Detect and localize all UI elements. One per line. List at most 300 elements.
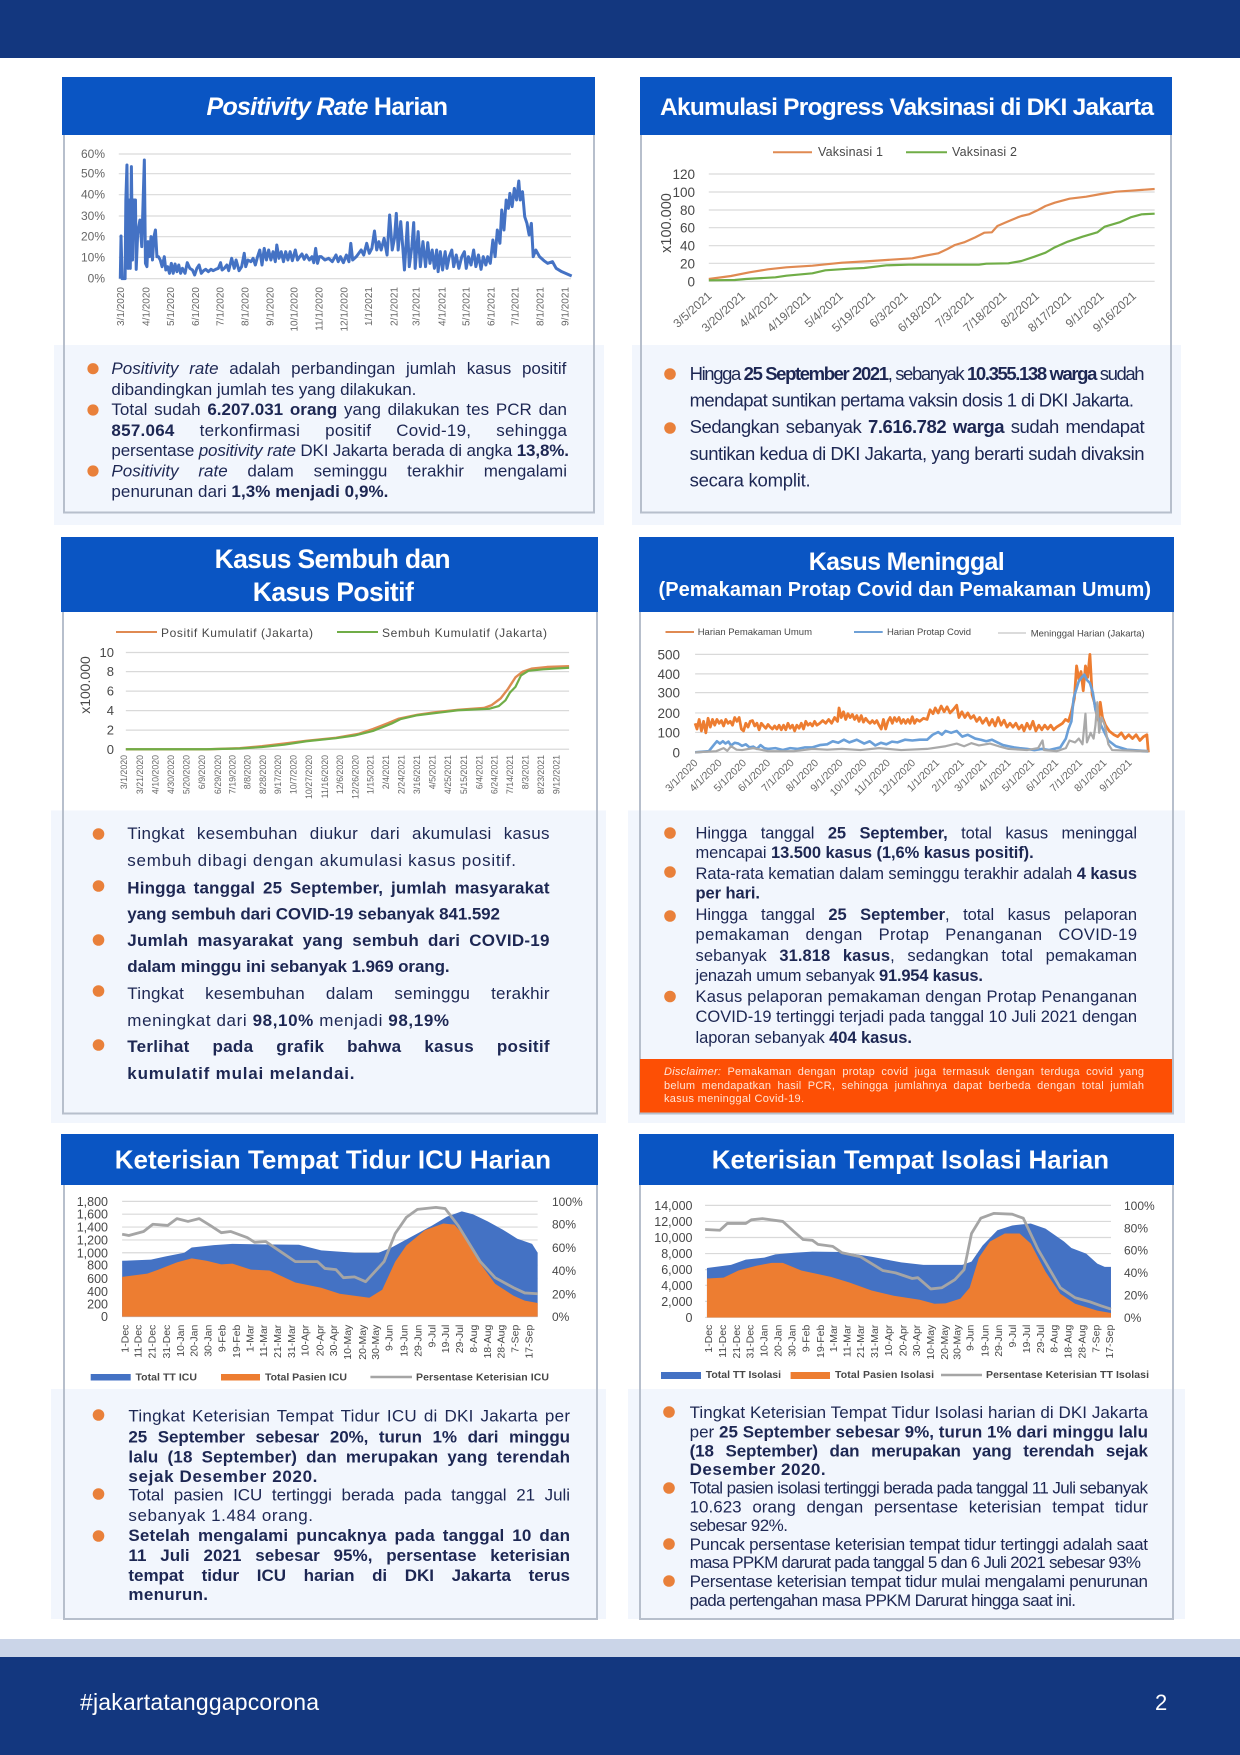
area chart: isolation occupancy: 10-Apr	[883, 1324, 895, 1356]
line chart: daily burials and deaths: 6/1/2020	[736, 757, 773, 795]
area chart: ICU occupancy: 31-Mar	[286, 1324, 298, 1358]
text block: positivity rate bullets: Positivity rate dalam seminggu terakhir mengalami	[111, 462, 567, 481]
line chart: cumulative cases: 7/14/2021	[505, 755, 515, 794]
line chart: cumulative cases: 2/4/2021	[381, 755, 391, 789]
line chart: cumulative cases: 4/25/2021	[443, 755, 453, 794]
line chart: vaccination progress: 5/4/2021	[802, 289, 846, 330]
area chart: ICU occupancy: 11-Dec	[132, 1325, 144, 1358]
area chart: isolation occupancy: 20-May	[939, 1324, 951, 1360]
line chart: vaccination progress: 60	[680, 221, 695, 236]
line chart: vaccination progress: 4/19/2021	[764, 289, 814, 335]
heading: deaths and burials: (Pemakaman Protap Covid dan Pemakaman Umum)	[658, 579, 1151, 601]
line chart: positivity rate: 10%	[81, 250, 105, 264]
line chart: vaccination progress: 6/3/2021	[867, 289, 911, 330]
line chart: cumulative cases: 2	[107, 723, 114, 738]
line chart: vaccination progress: 3/20/2021	[699, 289, 748, 335]
heading: isolation occupancy: Keterisian Tempat Isolasi Harian	[712, 1144, 1109, 1174]
line chart: cumulative cases: 4/5/2021	[427, 755, 437, 789]
text block: ICU bullets: 25 September sebesar 20%, turun 1% dari minggu	[128, 1427, 570, 1446]
legend: burial series	[666, 627, 1145, 640]
line chart: cumulative cases: 6/9/2020	[197, 755, 207, 789]
text block: ICU bullets	[93, 1406, 570, 1604]
text block: death bullets: Rata-rata kematian dalam seminggu terakhir adalah 4 kasus	[696, 865, 1137, 883]
text block: isolation bullets: 10.623 orang dengan persentase keterisian tempat tidur	[690, 1498, 1148, 1517]
area chart: isolation occupancy: 7-Sep	[1090, 1325, 1102, 1353]
text block: isolation bullets: (18 September) dan merupakan yang terendah sejak	[690, 1442, 1149, 1460]
text block: positivity rate bullets: Total sudah 6.207.031 orang yang dilakukan tes PCR dan	[111, 400, 567, 419]
heading: deaths and burials	[639, 537, 1174, 612]
line chart: daily burials and deaths: 9/1/2021	[1097, 757, 1135, 795]
line chart: daily burials and deaths: 1/1/2021	[905, 757, 942, 795]
legend: vaccination series: Vaksinasi 2	[952, 145, 1017, 159]
legend: vaccination series: Vaksinasi 1	[818, 145, 883, 159]
line chart: cumulative cases: 8	[107, 664, 114, 679]
text block: death bullets	[664, 824, 1137, 1047]
line chart: vaccination progress: 4/4/2021	[736, 289, 781, 330]
area chart: isolation occupancy: 30-May	[952, 1324, 964, 1360]
line chart: cumulative cases: 9/17/2020	[273, 755, 283, 794]
panel: ICU occupancy	[51, 1134, 606, 1619]
area chart: ICU occupancy: 9-Feb	[217, 1325, 229, 1352]
text block: death bullets: sebanyak 31.818 kasus, sedangkan total pemakaman	[696, 947, 1137, 965]
panel: recovered and positive cases	[51, 537, 606, 1123]
area chart: ICU occupancy: 30-May	[370, 1324, 382, 1360]
text block: vaccination bullets	[664, 363, 1145, 491]
line chart: positivity rate: 8/1/2021	[536, 287, 546, 326]
line chart: cumulative cases: x100.000	[77, 656, 93, 714]
line chart: positivity rate: 3/1/2021	[412, 287, 423, 326]
area chart: isolation occupancy: 17-Sep	[1104, 1325, 1116, 1359]
area chart: isolation occupancy: 10-May	[925, 1324, 937, 1360]
text block: isolation bullets	[663, 1403, 1149, 1610]
area chart: ICU occupancy: 31-Dec	[161, 1325, 173, 1359]
legend: isolation series: Total TT Isolasi	[706, 1369, 781, 1381]
area chart: ICU occupancy: 1,400	[77, 1221, 108, 1235]
area chart: isolation occupancy: 2,000	[661, 1295, 693, 1309]
line chart: cumulative cases	[77, 626, 569, 799]
line chart: positivity rate: 5/1/2020	[166, 287, 177, 326]
text block: vaccination bullets: suntikan kedua di DKI Jakarta, yang berarti sudah divaksin	[690, 443, 1145, 464]
text block: recovery bullets: Terlihat pada grafik bahwa kasus positif	[127, 1037, 550, 1056]
area chart: ICU occupancy	[77, 1195, 583, 1384]
area chart: isolation occupancy: 29-Jul	[1035, 1325, 1047, 1353]
line chart: positivity rate: 12/1/2020	[339, 287, 350, 332]
line chart: daily burials and deaths: 11/1/2020	[852, 757, 893, 798]
area chart: isolation occupancy: 30-Jan	[786, 1325, 798, 1357]
line chart: daily burials and deaths: 12/1/2020	[877, 757, 918, 799]
legend: ICU series	[91, 1372, 549, 1384]
area chart: ICU occupancy: 1,600	[77, 1208, 108, 1222]
area chart: isolation occupancy: 19-Jul	[1021, 1325, 1033, 1353]
legend: cumulative series	[116, 626, 547, 640]
text block: recovery bullets: Jumlah masyarakat yang sembuh dari COVID-19	[127, 931, 550, 950]
line chart: cumulative cases: 7/19/2020	[228, 755, 238, 794]
line chart: daily burials and deaths: 5/1/2021	[1000, 757, 1037, 795]
line chart: positivity rate: 11/1/2020	[315, 287, 326, 331]
line chart: vaccination progress: 0	[687, 274, 695, 289]
line chart: positivity rate: 6/1/2020	[191, 287, 202, 326]
text block: ICU bullets: Total pasien ICU tertinggi berada pada tanggal 21 Juli	[128, 1486, 570, 1505]
line chart: vaccination progress: 9/16/2021	[1090, 289, 1139, 335]
area chart: isolation occupancy: 31-Mar	[869, 1324, 881, 1358]
area chart: isolation occupancy: 9-Jul	[1007, 1325, 1019, 1347]
line chart: vaccination progress: 8/2/2021	[998, 289, 1042, 330]
line chart: positivity rate: 30%	[81, 209, 105, 223]
line chart: positivity rate: 6/1/2021	[486, 287, 497, 326]
area chart: ICU occupancy: 100%	[552, 1195, 583, 1209]
text block: death bullets: COVID-19 tertinggi terjadi pada tanggal 10 Juli 2021 dengan	[696, 1008, 1137, 1026]
top banner	[0, 0, 1240, 58]
legend: ICU series: Total Pasien ICU	[265, 1372, 347, 1384]
line chart: cumulative cases: 4/10/2020	[151, 755, 161, 794]
area chart: isolation occupancy: 9-Jun	[965, 1325, 977, 1351]
legend: isolation series	[661, 1369, 1149, 1381]
text block: recovery bullets: Tingkat kesembuhan diukur dari akumulasi kasus	[127, 824, 550, 843]
line chart: vaccination progress: 3/5/2021	[670, 289, 715, 330]
line chart: positivity rate: 1/1/2021	[364, 287, 375, 326]
line chart: positivity rate: 60%	[81, 147, 105, 161]
line chart: cumulative cases: 4/30/2020	[166, 755, 176, 794]
area chart: isolation occupancy: 21-Mar	[855, 1324, 867, 1358]
heading: isolation occupancy	[639, 1134, 1174, 1185]
area chart: ICU occupancy: 9-Jul	[426, 1325, 438, 1347]
line chart: vaccination progress: 7/18/2021	[960, 289, 1010, 335]
area chart: ICU occupancy: 7-Sep	[509, 1325, 521, 1353]
area chart: ICU occupancy: 9-Jun	[384, 1325, 396, 1351]
text block: isolation bullets: Puncak persentase keterisian tempat tidur tertinggi adalah saat	[690, 1535, 1148, 1554]
area chart: isolation occupancy: 100%	[1124, 1199, 1155, 1213]
area chart: isolation occupancy	[654, 1199, 1155, 1381]
area chart: isolation occupancy: 19-Jun	[980, 1325, 992, 1357]
area chart: ICU occupancy: 1-Dec	[119, 1325, 131, 1353]
heading: ICU occupancy: Keterisian Tempat Tidur ICU Harian	[115, 1144, 551, 1174]
line chart: positivity rate: 40%	[81, 188, 105, 202]
area chart: ICU occupancy: 29-Jul	[454, 1325, 466, 1353]
line chart: vaccination progress: 8/17/2021	[1025, 289, 1074, 335]
area chart: ICU occupancy: 18-Aug	[482, 1325, 494, 1359]
line chart: positivity rate: 4/1/2021	[438, 287, 448, 326]
line chart: cumulative cases: 6/4/2021	[474, 755, 484, 789]
line chart: cumulative cases: 10/27/2020	[304, 755, 314, 799]
area chart: ICU occupancy: 20-May	[357, 1324, 369, 1360]
text block: recovery bullets: meningkat dari 98,10% menjadi 98,19%	[127, 1011, 449, 1030]
heading: recovered and positive cases	[61, 537, 598, 612]
line chart: cumulative cases: 8/3/2021	[521, 755, 531, 789]
line chart: cumulative cases: 5/15/2021	[459, 755, 469, 794]
line chart: cumulative cases: 10	[100, 645, 114, 660]
line chart: vaccination progress: 80	[680, 203, 695, 218]
text block: positivity rate bullets: persentase positivity rate DKI Jakarta berada di angka 13,8%.	[111, 441, 569, 460]
area chart: ICU occupancy: 0%	[552, 1310, 570, 1324]
line chart: positivity rate: 5/1/2021	[462, 287, 472, 326]
text block: positivity rate bullets: Positivity rate adalah perbandingan jumlah kasus positif	[111, 359, 567, 378]
area chart: ICU occupancy: 10-Jan	[175, 1325, 187, 1357]
heading: vaccination progress: Akumulasi Progress Vaksinasi di DKI Jakarta	[660, 94, 1154, 121]
line chart: positivity rate: 0%	[88, 272, 105, 286]
legend: cumulative series: Positif Kumulatif (Jakarta)	[161, 626, 313, 640]
line chart: cumulative cases: 11/16/2020	[320, 755, 330, 798]
text block: positivity rate bullets	[87, 359, 569, 501]
panel: vaccination progress	[632, 77, 1181, 525]
line chart: cumulative cases: 1/15/2021	[366, 755, 376, 794]
heading: ICU occupancy	[61, 1134, 598, 1185]
area chart: ICU occupancy: 19-Jun	[398, 1325, 410, 1357]
text block: recovery bullets: sembuh dibagi dengan akumulasi kasus positif.	[127, 851, 516, 870]
area chart: ICU occupancy: 1,200	[77, 1233, 108, 1247]
area chart: ICU occupancy: 17-Sep	[523, 1325, 535, 1359]
line chart: vaccination progress: 100	[672, 185, 695, 200]
area chart: ICU occupancy: 20-Jan	[189, 1325, 201, 1357]
area chart: isolation occupancy: 28-Aug	[1076, 1325, 1088, 1359]
line chart: daily burials and deaths: 4/1/2020	[687, 757, 725, 795]
area chart: isolation occupancy: 6,000	[661, 1263, 693, 1277]
legend: burial series: Meninggal Harian (Jakarta)	[1031, 628, 1145, 640]
area chart: ICU occupancy: 0	[101, 1310, 108, 1324]
text block: isolation bullets: masa PPKM darurat pada tanggal 5 dan 6 Juli 2021 sebesar 93%	[690, 1553, 1141, 1572]
line chart: daily burials and deaths: 3/1/2021	[952, 757, 990, 795]
line chart: vaccination progress: x100.000	[659, 193, 675, 253]
text block: recovery bullets: yang sembuh dari COVID-19 sebanyak 841.592	[127, 905, 500, 924]
text block: ICU bullets: menurun.	[128, 1585, 208, 1604]
text block: death bullets: Hingga tanggal 25 September, total kasus pelaporan	[696, 906, 1137, 924]
text block: isolation bullets: Total pasien isolasi tertinggi berada pada tanggal 11 Juli sebanyak	[690, 1478, 1148, 1498]
line chart: cumulative cases: 3/1/2020	[119, 755, 129, 789]
area chart: ICU occupancy: 8-Aug	[468, 1325, 480, 1353]
area chart: ICU occupancy: 20%	[552, 1287, 576, 1301]
text block: ICU bullets: Setelah mengalami puncaknya pada tanggal 10 dan	[128, 1526, 570, 1545]
heading: deaths and burials: Kasus Meninggal	[809, 548, 1005, 576]
line chart: cumulative cases: 12/6/2020	[335, 755, 345, 794]
area chart: ICU occupancy: 21-Mar	[272, 1324, 284, 1358]
area chart: ICU occupancy: 200	[87, 1297, 108, 1311]
line chart: daily burials and deaths: 100	[657, 725, 680, 740]
text block: isolation bullets: per 25 September sebesar 9%, turun 1% dari minggu lalu	[690, 1423, 1148, 1442]
line chart: daily burials and deaths: 10/1/2020	[828, 757, 869, 799]
line chart: daily burials and deaths: 300	[657, 686, 680, 701]
line chart: cumulative cases: 0	[107, 742, 114, 757]
text block: vaccination bullets: Hingga 25 September 2021, sebanyak 10.355.138 warga sudah	[690, 363, 1145, 384]
area chart: ICU occupancy: 19-Feb	[231, 1325, 243, 1358]
area chart: isolation occupancy: 11-Dec	[717, 1325, 729, 1358]
area chart: isolation occupancy: 1-Mar	[828, 1324, 840, 1352]
area chart: isolation occupancy: 30-Apr	[911, 1324, 923, 1356]
legend: cumulative series: Sembuh Kumulatif (Jakarta)	[382, 626, 547, 640]
text block: isolation bullets: pada pertengahan masa PPKM Darurat hingga saat ini.	[690, 1591, 1076, 1610]
line chart: cumulative cases: 8/8/2020	[242, 755, 252, 789]
page number: 2	[1155, 1690, 1167, 1715]
text block: vaccination bullets: secara komplit.	[690, 470, 811, 491]
line chart: daily burials and deaths: 5/1/2020	[712, 757, 749, 795]
line chart: daily burials and deaths: 3/1/2020	[663, 757, 701, 795]
area chart: isolation occupancy: 14,000	[654, 1199, 693, 1213]
line chart: cumulative cases: 8/23/2021	[536, 755, 546, 794]
text block: ICU bullets: sebanyak 1.484 orang.	[128, 1506, 313, 1525]
legend: isolation series: Persentase Keterisian TT Isolasi	[986, 1369, 1149, 1381]
area chart: ICU occupancy: 400	[87, 1285, 108, 1299]
area chart: isolation occupancy: 31-Dec	[744, 1325, 756, 1359]
text block: recovery bullets: dalam minggu ini sebanyak 1.969 orang.	[127, 957, 450, 976]
callout: disclaimer: Disclaimer: Pemakaman dengan protap covid juga termasuk dengan terduga covid yang	[664, 1066, 1144, 1078]
area chart: isolation occupancy: 12,000	[654, 1215, 693, 1229]
line chart: vaccination progress: 6/18/2021	[895, 289, 944, 335]
text block: vaccination bullets: Sedangkan sebanyak 7.616.782 warga sudah mendapat	[690, 416, 1145, 437]
line chart: cumulative cases: 3/21/2020	[135, 755, 145, 794]
footer strip	[0, 1639, 1240, 1657]
area chart: isolation occupancy: 4,000	[661, 1279, 693, 1293]
line chart: positivity rate: 2/1/2021	[389, 287, 400, 326]
text block: ICU bullets: lalu (18 September) dan merupakan yang terendah	[128, 1448, 570, 1466]
line chart: daily burials and deaths: 9/1/2020	[808, 757, 846, 795]
area chart: isolation occupancy: 8-Aug	[1049, 1325, 1061, 1353]
area chart: ICU occupancy: 800	[87, 1259, 108, 1273]
line chart: positivity rate: 7/1/2021	[511, 287, 522, 326]
line chart: daily burials and deaths: 200	[657, 706, 680, 721]
line chart: daily burials and deaths: 500	[657, 647, 680, 662]
line chart: vaccination progress: 20	[680, 256, 695, 271]
heading: recovered and positive cases: Kasus Sembuh dan	[215, 544, 451, 574]
line chart: cumulative cases: 2/24/2021	[397, 755, 407, 794]
legend: burial series: Harian Pemakaman Umum	[698, 627, 812, 638]
area chart: isolation occupancy: 1-Dec	[703, 1325, 715, 1353]
area chart: isolation occupancy: 29-Jun	[993, 1325, 1005, 1357]
line chart: vaccination progress: 5/19/2021	[829, 289, 878, 335]
text block: recovery bullets	[93, 824, 550, 1083]
footer	[0, 1657, 1240, 1755]
callout: disclaimer: belum mendapatkan hasil PCR, sehingga jumlahnya dapat berbeda dengan total jumlah	[664, 1080, 1144, 1092]
line chart: daily burials and deaths: 8/1/2021	[1072, 757, 1110, 795]
area chart: ICU occupancy: 30-Jan	[203, 1325, 215, 1357]
line chart: daily burials and deaths: 4/1/2021	[976, 757, 1014, 795]
area chart: isolation occupancy: 10-Jan	[759, 1325, 771, 1357]
legend: ICU series: Persentase Keterisian ICU	[416, 1372, 549, 1384]
area chart: ICU occupancy: 30-Apr	[328, 1324, 340, 1356]
text block: ICU bullets: sejak Desember 2020.	[128, 1467, 317, 1486]
line chart: positivity rate: 8/1/2020	[241, 287, 252, 326]
line chart: daily burials and deaths: 6/1/2021	[1024, 757, 1061, 795]
line chart: positivity rate: 9/1/2021	[560, 287, 571, 326]
text block: ICU bullets: Tingkat Keterisian Tempat Tidur ICU di DKI Jakarta per	[128, 1406, 570, 1426]
text block: death bullets: Kasus pelaporan pemakaman dengan Protap Penanganan	[696, 988, 1137, 1006]
legend: burial series: Harian Protap Covid	[887, 627, 971, 638]
area chart: ICU occupancy: 20-Apr	[314, 1324, 326, 1356]
area chart: isolation occupancy: 9-Feb	[800, 1325, 812, 1352]
area chart: ICU occupancy: 11-Mar	[258, 1324, 270, 1357]
text block: death bullets: pemakaman dengan Protap Penanganan COVID-19	[696, 926, 1137, 944]
area chart: ICU occupancy: 10-May	[342, 1324, 354, 1360]
line chart: cumulative cases: 6/29/2020	[213, 755, 223, 794]
line chart: positivity rate	[81, 147, 572, 332]
area chart: isolation occupancy: 0%	[1124, 1311, 1142, 1325]
area chart: ICU occupancy: 19-Jul	[440, 1325, 452, 1353]
area chart: ICU occupancy: 1,000	[77, 1246, 108, 1260]
legend: vaccination series	[773, 145, 1017, 159]
text block: recovery bullets: Tingkat kesembuhan dalam seminggu terakhir	[127, 984, 550, 1003]
hashtag: #jakartatanggapcorona	[80, 1689, 319, 1715]
line chart: daily burials and deaths: 8/1/2020	[784, 757, 821, 795]
area chart: ICU occupancy: 1-Mar	[244, 1324, 256, 1352]
line chart: positivity rate: 3/1/2020	[116, 287, 127, 326]
line chart: daily burials and deaths	[657, 627, 1148, 799]
text block: isolation bullets: Desember 2020.	[690, 1460, 826, 1479]
text block: isolation bullets: Persentase keterisian tempat tidur mulai mengalami penurunan	[690, 1572, 1148, 1591]
text block: death bullets: jenazah umum sebanyak 91.954 kasus.	[694, 967, 983, 985]
line chart: vaccination progress	[659, 145, 1155, 335]
area chart: ICU occupancy: 60%	[552, 1241, 576, 1255]
heading: vaccination progress	[640, 77, 1172, 135]
area chart: ICU occupancy: 21-Dec	[147, 1325, 159, 1359]
line chart: cumulative cases: 8/28/2020	[258, 755, 268, 794]
area chart: ICU occupancy: 1,800	[77, 1195, 108, 1209]
panel: deaths and burials	[628, 537, 1185, 1123]
text block: positivity rate bullets: penurunan dari 1,3% menjadi 0,9%.	[111, 482, 388, 501]
text block: death bullets: mencapai 13.500 kasus (1,6% kasus positif).	[696, 844, 1034, 862]
area chart: isolation occupancy: 20-Apr	[897, 1324, 909, 1356]
area chart: isolation occupancy: 80%	[1124, 1221, 1148, 1235]
line chart: positivity rate: 7/1/2020	[216, 287, 226, 326]
area chart: ICU occupancy: 28-Aug	[496, 1325, 508, 1359]
panel: positivity rate	[54, 77, 604, 525]
callout: disclaimer: kasus meninggal Covid-19.	[664, 1093, 804, 1105]
area chart: ICU occupancy: 10-Apr	[300, 1324, 312, 1356]
line chart: cumulative cases: 6/24/2021	[490, 755, 500, 794]
area chart: ICU occupancy: 80%	[552, 1218, 576, 1232]
line chart: vaccination progress: 7/3/2021	[932, 289, 977, 330]
line chart: positivity rate: 50%	[81, 167, 105, 181]
heading: positivity rate	[62, 77, 595, 135]
line chart: positivity rate: 9/1/2020	[265, 287, 276, 326]
text block: isolation bullets: Tingkat Keterisian Tempat Tidur Isolasi harian di DKI Jakarta	[690, 1403, 1149, 1422]
line chart: cumulative cases: 4	[107, 703, 114, 718]
line chart: cumulative cases: 3/16/2021	[412, 755, 422, 794]
text block: death bullets: per hari.	[696, 884, 760, 902]
line chart: daily burials and deaths: 2/1/2021	[930, 757, 967, 795]
text block: ICU bullets: tempat tidur ICU harian di DKI Jakarta terus	[128, 1566, 570, 1585]
area chart: ICU occupancy: 40%	[552, 1264, 576, 1278]
area chart: isolation occupancy: 40%	[1124, 1266, 1148, 1280]
line chart: vaccination progress: 9/1/2021	[1063, 289, 1107, 330]
area chart: isolation occupancy: 18-Aug	[1063, 1325, 1075, 1359]
panel: isolation occupancy	[628, 1134, 1185, 1619]
line chart: vaccination progress: 40	[680, 239, 695, 254]
area chart: ICU occupancy: 600	[87, 1272, 108, 1286]
line chart: daily burials and deaths: 0	[672, 745, 680, 760]
text block: death bullets: laporan sebanyak 404 kasus.	[696, 1029, 912, 1047]
line chart: vaccination progress: 120	[672, 167, 695, 182]
area chart: ICU occupancy: 29-Jun	[412, 1325, 424, 1357]
text block: ICU bullets: 11 Juli 2021 sebesar 95%, persentase keterisian	[128, 1546, 570, 1565]
line chart: cumulative cases: 6	[107, 684, 114, 699]
line chart: positivity rate: 10/1/2020	[290, 287, 300, 332]
legend: isolation series: Total Pasien Isolasi	[835, 1369, 934, 1381]
line chart: positivity rate: 20%	[81, 230, 105, 244]
line chart: cumulative cases: 5/20/2020	[181, 755, 191, 794]
line chart: cumulative cases: 10/7/2020	[289, 755, 299, 794]
area chart: isolation occupancy: 60%	[1124, 1244, 1148, 1258]
text block: positivity rate bullets: dibandingkan jumlah tes yang dilakukan.	[111, 380, 416, 399]
text block: death bullets: Hingga tanggal 25 September, total kasus meninggal	[696, 824, 1137, 842]
callout: disclaimer	[640, 1059, 1172, 1112]
area chart: isolation occupancy: 10,000	[654, 1231, 693, 1245]
heading: positivity rate: Positivity Rate Harian	[206, 93, 448, 121]
area chart: isolation occupancy: 21-Dec	[731, 1325, 743, 1359]
area chart: isolation occupancy: 19-Feb	[815, 1325, 827, 1358]
text block: isolation bullets: sebesar 92%.	[690, 1516, 788, 1535]
area chart: isolation occupancy: 20%	[1124, 1288, 1148, 1302]
text block: positivity rate bullets: 857.064 terkonfirmasi positif Covid-19, sehingga	[111, 421, 568, 440]
line chart: daily burials and deaths: 400	[657, 667, 680, 682]
text block: recovery bullets: Hingga tanggal 25 September, jumlah masyarakat	[127, 878, 550, 898]
area chart: isolation occupancy: 0	[686, 1311, 693, 1325]
